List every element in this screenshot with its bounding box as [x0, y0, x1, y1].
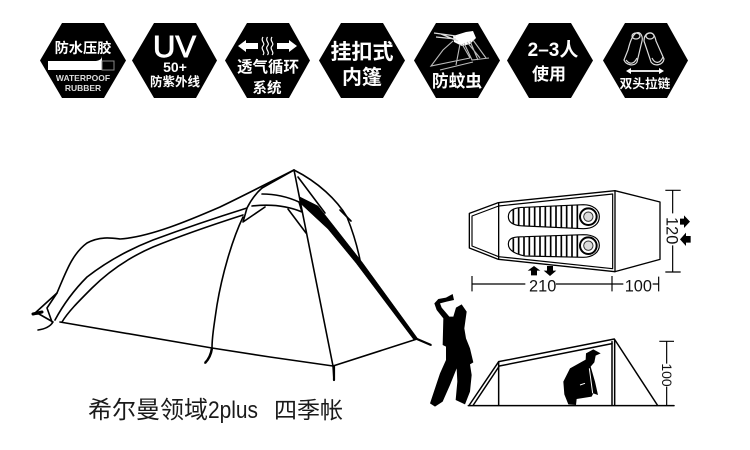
sleeping bag top	[508, 205, 599, 229]
badge: hanging inner tent	[319, 23, 405, 98]
badge: mosquito proof	[414, 23, 500, 98]
side elevation with figures	[430, 294, 675, 407]
icon: mosquito	[431, 31, 489, 70]
icon row: feature badges	[40, 23, 688, 98]
badge: 2-3 persons	[507, 23, 593, 98]
badge: 2-3 persons: 2–3人	[528, 39, 578, 61]
floor plan with dimensions	[469, 190, 691, 295]
badge: hanging inner tent: 挂扣式	[330, 41, 394, 64]
tent illustration: main side view	[33, 170, 431, 380]
badge: mosquito proof: 防蚊虫	[432, 71, 482, 91]
dimension width 210 / 100: 210	[529, 277, 556, 295]
badge: air circulation	[225, 23, 310, 98]
badge: UV 50+: 防紫外线	[150, 74, 200, 89]
caption: product name: 四季帐	[274, 397, 343, 423]
badge: air circulation: 系统	[252, 79, 282, 97]
dimension height 100: 100	[659, 363, 675, 387]
silhouette: standing person	[430, 294, 473, 407]
tent profile	[468, 339, 674, 406]
badge: double zipper: 双头拉链	[620, 76, 671, 91]
icon: zipper pulls	[624, 33, 664, 65]
arrows: door markers	[528, 215, 691, 276]
badge: waterproof rubber: WATERPOOF	[56, 73, 110, 83]
caption: product name: 希尔曼领域	[88, 397, 208, 424]
badge: UV 50+	[132, 23, 217, 98]
badge: air circulation: 透气循环	[237, 58, 299, 76]
caption: product name: 2plus	[208, 397, 258, 424]
badge: double zipper	[603, 23, 688, 98]
caption: product name	[88, 397, 343, 424]
badge: waterproof rubber: 防水压胶	[55, 40, 111, 57]
sleeping bag bottom	[508, 235, 599, 257]
badge: 2-3 persons: 使用	[532, 65, 566, 84]
badge: waterproof rubber	[40, 23, 126, 98]
badge: UV 50+: 50+	[163, 59, 187, 75]
dimension depth 120: 120	[663, 217, 681, 244]
badge: waterproof rubber: RUBBER	[65, 83, 101, 93]
dimension width 210 / 100: 100	[625, 277, 652, 295]
dimension width 210 / 100	[472, 276, 659, 295]
badge: hanging inner tent: 内篷	[342, 66, 382, 89]
dimension depth 120	[663, 190, 681, 272]
silhouette: crouching person	[563, 349, 601, 405]
badge: UV 50+: UV	[153, 29, 196, 64]
dimension height 100	[659, 341, 675, 406]
tent outline from above	[469, 191, 660, 272]
